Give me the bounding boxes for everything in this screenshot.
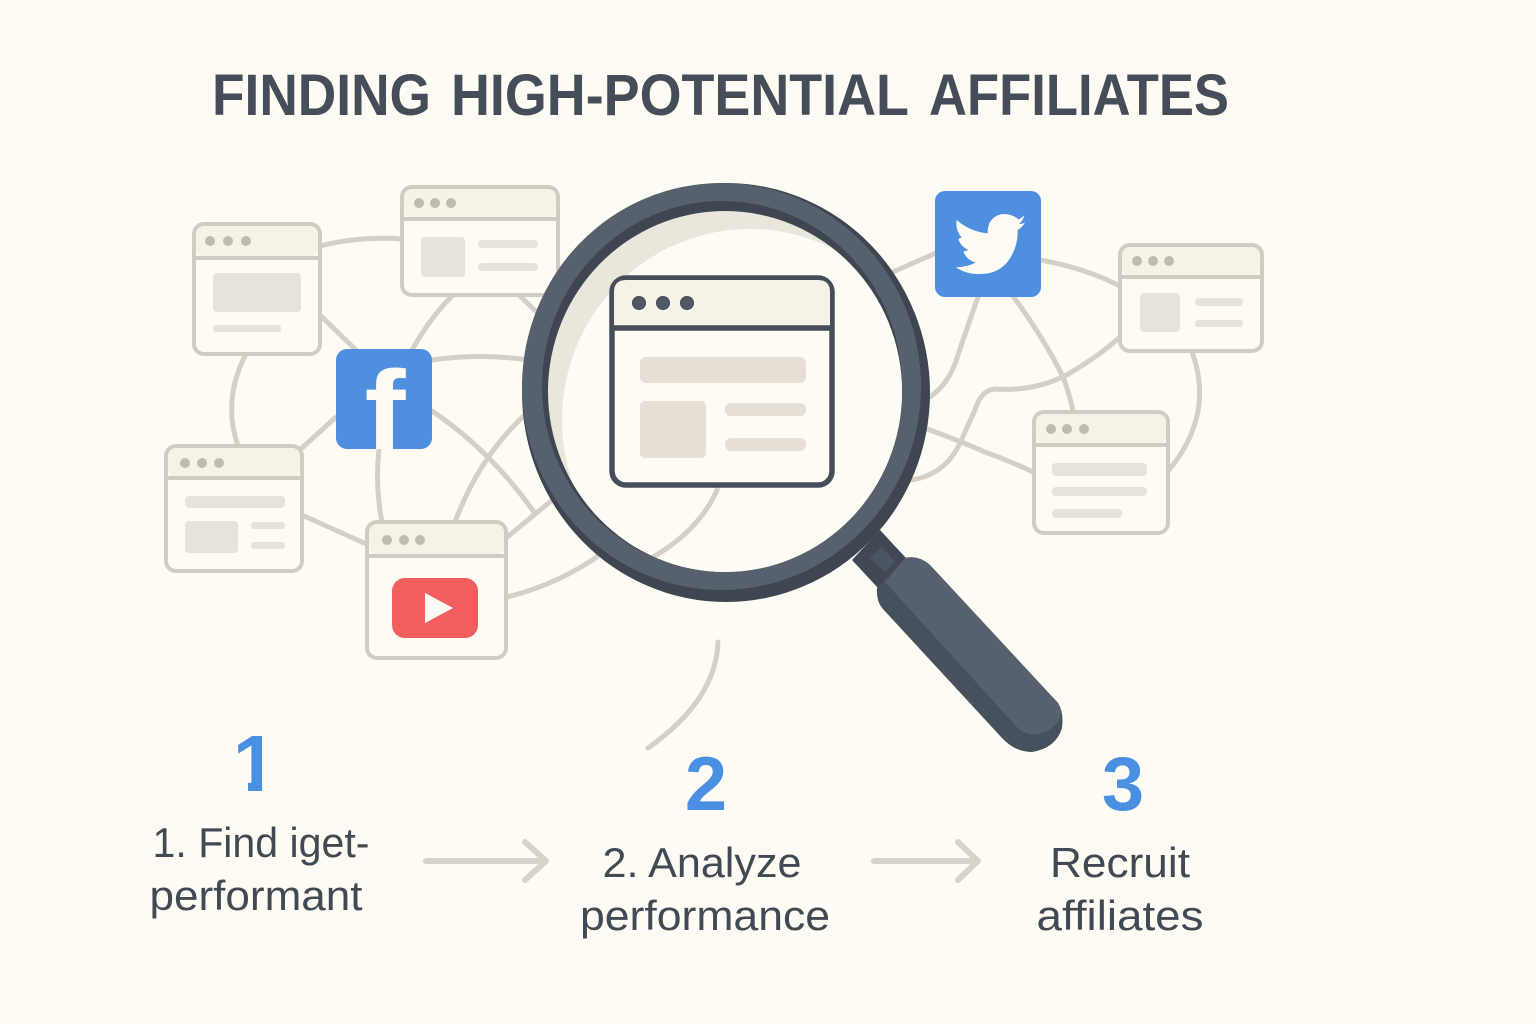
- icon: Facebook: [336, 347, 432, 473]
- step 3: affiliates: [1036, 892, 1204, 939]
- arrow: step 1 to 2: [426, 842, 546, 880]
- step 3: [1036, 742, 1204, 939]
- step 2: performance: [580, 892, 830, 939]
- step 1: 1: [233, 719, 277, 808]
- step 2: [580, 742, 830, 939]
- magnifier handle: [852, 530, 1062, 752]
- browser window: top left: [194, 224, 320, 354]
- network connector lines: [232, 238, 1200, 748]
- browser window: YouTube: [367, 522, 506, 658]
- magnifier ring: [522, 183, 930, 602]
- browser window: lower left: [166, 446, 302, 571]
- browser window: top middle: [402, 187, 558, 295]
- icon: Facebook: f: [364, 347, 406, 473]
- step 3: 3: [1102, 742, 1144, 827]
- browser window: right top: [1120, 245, 1262, 351]
- title: FINDING: [212, 63, 431, 128]
- browser window: right lower: [1034, 412, 1168, 533]
- icon: Twitter: [935, 191, 1041, 297]
- title: AFFILIATES: [929, 63, 1229, 128]
- arrow: step 2 to 3: [874, 842, 978, 880]
- icon: YouTube play button: [392, 578, 478, 638]
- step 2: 2: [685, 742, 727, 827]
- magnifier lens: [548, 211, 902, 572]
- step 1: [152, 736, 368, 918]
- step 1: performant: [150, 872, 363, 919]
- magnifying glass: [522, 183, 1062, 752]
- title: HIGH-POTENTIAL: [451, 63, 908, 128]
- step 1: 1. Find iget-: [152, 819, 370, 866]
- step 2: 2. Analyze: [602, 839, 802, 886]
- central browser window: [612, 278, 832, 485]
- step 3: Recruit: [1050, 839, 1190, 886]
